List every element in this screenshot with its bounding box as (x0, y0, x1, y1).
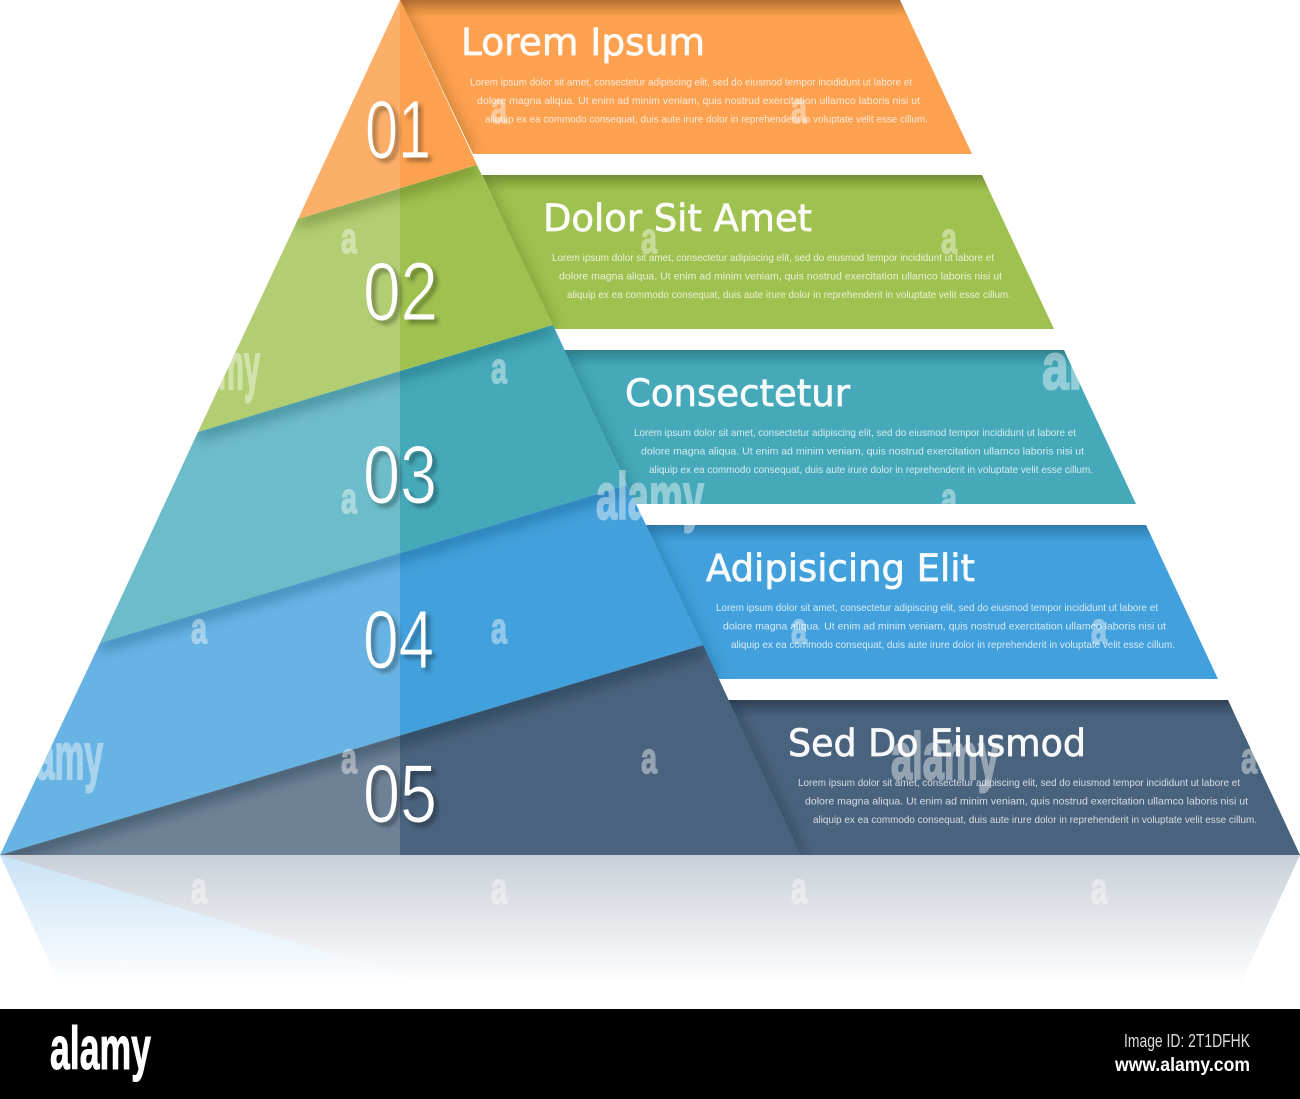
title 1: Lorem Ipsum (461, 21, 705, 64)
watermark: a (341, 474, 357, 523)
watermark: a (941, 474, 957, 523)
watermark: a (491, 864, 507, 913)
watermark: a (641, 734, 657, 783)
image id: Image ID: 2T1DFHK (1124, 1031, 1250, 1051)
number 04: 04 (363, 593, 434, 686)
watermark: al (1042, 329, 1082, 403)
panel 4: Adipisicing Elit (646, 525, 1218, 679)
panel 5: Sed Do Eiusmod (728, 700, 1300, 855)
body text 2: aliquip ex ea commodo consequat, duis aute irure dolor in reprehenderit in voluptate velit esse cillum. (567, 289, 1011, 301)
watermark: alamy (596, 459, 704, 533)
watermark: a (191, 864, 207, 913)
body text 3: Lorem ipsum dolor sit amet, consectetur adipiscing elit, sed do eiusmod tempor incididunt ut labore et (634, 427, 1076, 439)
footer bar (0, 1009, 1300, 1099)
face 2: green (198, 165, 553, 432)
watermark (36, 84, 1257, 913)
title 3: Consectetur (625, 372, 851, 415)
number 05: 05 (363, 747, 437, 840)
body text 3: dolore magna aliqua. Ut enim ad minim veniam, quis nostrud exercitation ullamco laboris nisi ut (641, 446, 1084, 458)
panel 3: Consectetur (564, 350, 1136, 504)
body text 4: Lorem ipsum dolor sit amet, consectetur adipiscing elit, sed do eiusmod tempor incididunt ut labore et (716, 602, 1158, 614)
watermark: a (341, 734, 357, 783)
watermark: a (491, 344, 507, 393)
watermark: a (1091, 864, 1107, 913)
reflection below the pyramid (0, 855, 1300, 986)
watermark: a (1241, 734, 1257, 783)
watermark: a (641, 214, 657, 263)
watermark: a (191, 604, 207, 653)
title 4: Adipisicing Elit (706, 547, 975, 590)
body text 5: dolore magna aliqua. Ut enim ad minim veniam, quis nostrud exercitation ullamco laboris nisi ut (805, 796, 1248, 808)
number 01: 01 (365, 83, 431, 176)
body text 5 (798, 777, 1257, 826)
body text 2: Lorem ipsum dolor sit amet, consectetur adipiscing elit, sed do eiusmod tempor incididunt ut labore et (552, 252, 994, 264)
panel 1: Lorem Ipsum (380, 0, 972, 154)
face 5: navy (0, 645, 801, 861)
body text 1: aliquip ex ea commodo consequat, duis aute irure dolor in reprehenderit in voluptate velit esse cillum. (485, 114, 928, 126)
footer logo: alamy (50, 1015, 151, 1082)
watermark: a (791, 864, 807, 913)
body text 2: dolore magna aliqua. Ut enim ad minim veniam, quis nostrud exercitation ullamco laboris nisi ut (559, 270, 1002, 282)
body text 1: Lorem ipsum dolor sit amet, consectetur adipiscing elit, sed do eiusmod tempor incididunt ut labore et (470, 76, 912, 88)
watermark: a (1091, 604, 1107, 653)
body text 1 (470, 76, 928, 126)
body text 4: dolore magna aliqua. Ut enim ad minim veniam, quis nostrud exercitation ullamco laboris nisi ut (723, 620, 1166, 632)
face 4: blue (0, 485, 703, 855)
title 5: Sed Do Eiusmod (788, 722, 1086, 765)
body text 5: Lorem ipsum dolor sit amet, consectetur adipiscing elit, sed do eiusmod tempor incididunt ut labore et (798, 777, 1240, 789)
watermark: a (491, 604, 507, 653)
watermark: a (791, 84, 807, 133)
body text 1: dolore magna aliqua. Ut enim ad minim veniam, quis nostrud exercitation ullamco laboris nisi ut (477, 95, 920, 107)
body text 5: aliquip ex ea commodo consequat, duis aute irure dolor in reprehenderit in voluptate velit esse cillum. (813, 814, 1257, 826)
body text 4: aliquip ex ea commodo consequat, duis aute irure dolor in reprehenderit in voluptate velit esse cillum. (731, 639, 1175, 651)
watermark: a (941, 214, 957, 263)
face 3: teal (100, 325, 627, 643)
number 02: 02 (363, 245, 438, 338)
website: www.alamy.com (1114, 1055, 1250, 1076)
body text 4 (716, 602, 1175, 651)
watermark: a (341, 214, 357, 263)
body text 2 (552, 252, 1011, 301)
watermark: a (791, 604, 807, 653)
number 03: 03 (363, 428, 437, 521)
watermark: my (218, 329, 260, 403)
watermark: alamy (891, 719, 999, 793)
watermark: amy (36, 719, 103, 793)
body text 3 (634, 427, 1093, 476)
title 2: Dolor Sit Amet (543, 197, 812, 240)
face 1: orange (298, 0, 477, 219)
panel 2: Dolor Sit Amet (482, 175, 1054, 329)
watermark: a (491, 84, 507, 133)
body text 3: aliquip ex ea commodo consequat, duis aute irure dolor in reprehenderit in voluptate velit esse cillum. (649, 464, 1093, 476)
